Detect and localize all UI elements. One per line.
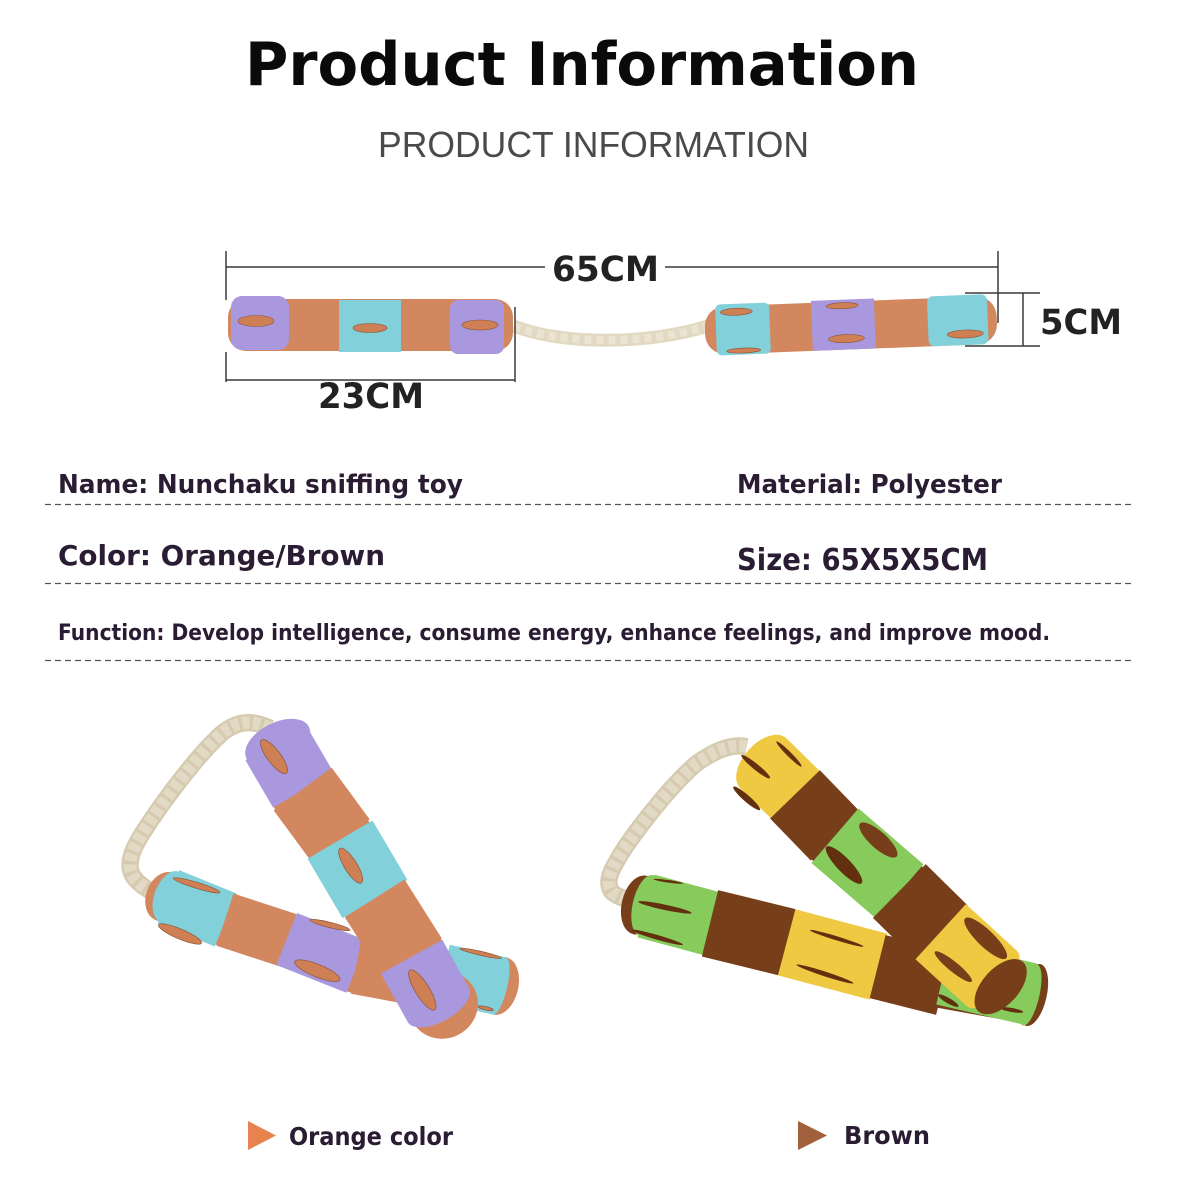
upper stick xyxy=(726,725,1037,1024)
rope xyxy=(130,723,270,892)
rope xyxy=(514,326,708,340)
23CM label: 23CM xyxy=(318,377,424,417)
spec: name: Name: Nunchaku sniffing toy xyxy=(58,470,463,500)
spec: material: Material: Polyester xyxy=(737,470,1002,500)
marker: brown xyxy=(798,1121,827,1150)
product photo: brown toy xyxy=(609,725,1053,1029)
label: brown: Brown xyxy=(844,1121,930,1150)
dimension lines xyxy=(226,251,1040,382)
label: orange color: Orange color xyxy=(289,1122,454,1151)
toy: left stick xyxy=(228,296,513,354)
5CM label: 5CM xyxy=(1040,303,1122,343)
rope xyxy=(609,746,747,900)
product photo: orange toy xyxy=(130,709,524,1051)
toy: right stick xyxy=(704,294,998,356)
upper stick xyxy=(237,709,490,1051)
spec: size: Size: 65X5X5CM xyxy=(737,543,988,578)
dimension diagram xyxy=(226,250,1122,417)
lower stick xyxy=(615,872,1053,1029)
marker: orange xyxy=(248,1121,276,1150)
65CM label: 65CM xyxy=(552,250,659,290)
subtitle: PRODUCT INFORMATION xyxy=(378,124,809,165)
lower stick xyxy=(138,866,524,1019)
spec: color: Color: Orange/Brown xyxy=(58,539,385,572)
spec: function: Function: Develop intelligence, consume energy, enhance feelings, and improve mood. xyxy=(58,621,1050,646)
title: Product Information xyxy=(245,30,919,100)
